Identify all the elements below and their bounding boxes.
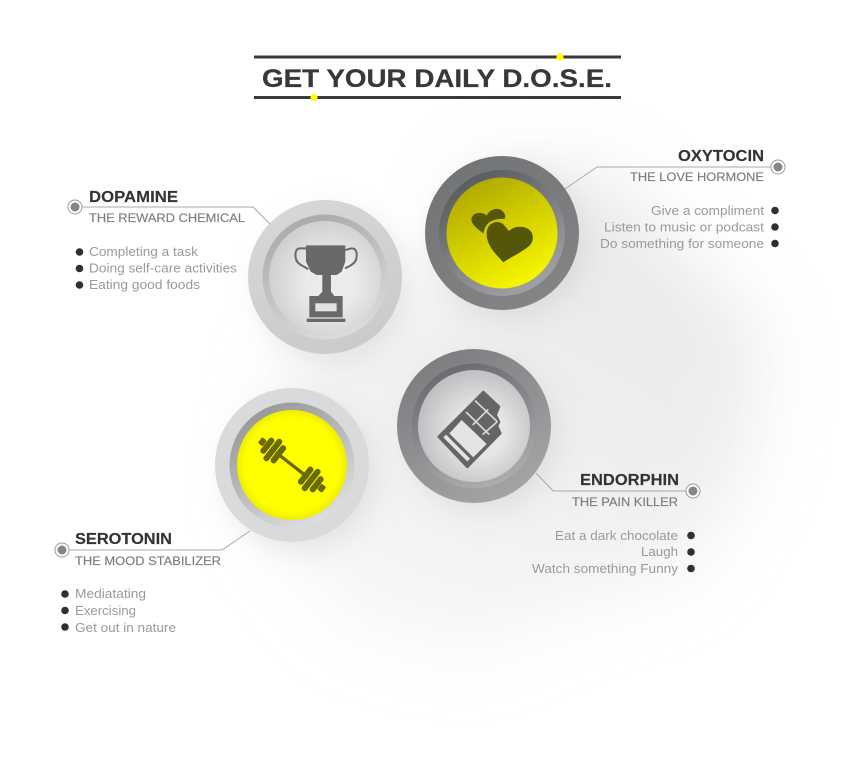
heading: dopamine: DOPAMINE	[89, 189, 178, 206]
connector: endorphin	[536, 473, 686, 491]
button: dopamine	[248, 200, 402, 354]
marker: dopamine	[68, 200, 82, 214]
background shadows	[224, 167, 760, 650]
list: oxytocin: Listen to music or podcast	[604, 220, 765, 234]
list: dopamine: Eating good foods	[89, 278, 200, 292]
list: endorphin: Watch something Funny	[532, 562, 679, 576]
title	[254, 53, 621, 101]
connector: oxytocin	[565, 167, 771, 189]
list: dopamine	[76, 245, 237, 292]
subheading: dopamine: THE REWARD CHEMICAL	[89, 211, 245, 225]
subheading: oxytocin: THE LOVE HORMONE	[630, 170, 764, 184]
list: serotonin: Mediatating	[75, 587, 146, 601]
list: serotonin: Exercising	[75, 604, 136, 618]
panel: oxytocin	[425, 148, 785, 310]
list: endorphin: Eat a dark chocolate	[555, 529, 678, 543]
subheading: serotonin: THE MOOD STABILIZER	[75, 554, 221, 568]
connector: serotonin	[70, 531, 250, 550]
marker: endorphin	[686, 484, 700, 498]
list: dopamine: Doing self-care activities	[89, 262, 237, 276]
icon: barbell	[252, 429, 332, 501]
heading: endorphin: ENDORPHIN	[580, 472, 679, 489]
subheading: endorphin: THE PAIN KILLER	[572, 495, 678, 509]
panel: endorphin	[397, 349, 700, 576]
heading: oxytocin: OXYTOCIN	[678, 148, 764, 165]
list: oxytocin: Do something for someone	[600, 237, 764, 251]
list: endorphin	[532, 529, 695, 576]
list: oxytocin	[600, 204, 779, 251]
icon: chocolate bar	[438, 392, 501, 467]
panel: serotonin	[55, 388, 369, 635]
panel: dopamine	[68, 189, 402, 354]
heading: serotonin: SEROTONIN	[75, 531, 172, 548]
list: oxytocin: Give a compliment	[651, 204, 765, 218]
marker: oxytocin	[771, 160, 785, 174]
icon: hearts	[471, 209, 533, 262]
marker: serotonin	[55, 543, 69, 557]
connector: dopamine	[82, 207, 270, 224]
list: serotonin: Get out in nature	[75, 621, 176, 635]
button: oxytocin	[425, 156, 579, 310]
list: endorphin: Laugh	[641, 545, 678, 559]
list: serotonin	[61, 587, 176, 635]
button: endorphin	[397, 349, 551, 503]
title: GET YOUR DAILY D.O.S.E.	[262, 65, 612, 93]
button: serotonin	[215, 388, 369, 542]
icon: trophy	[295, 245, 357, 322]
list: dopamine: Completing a task	[89, 245, 199, 259]
